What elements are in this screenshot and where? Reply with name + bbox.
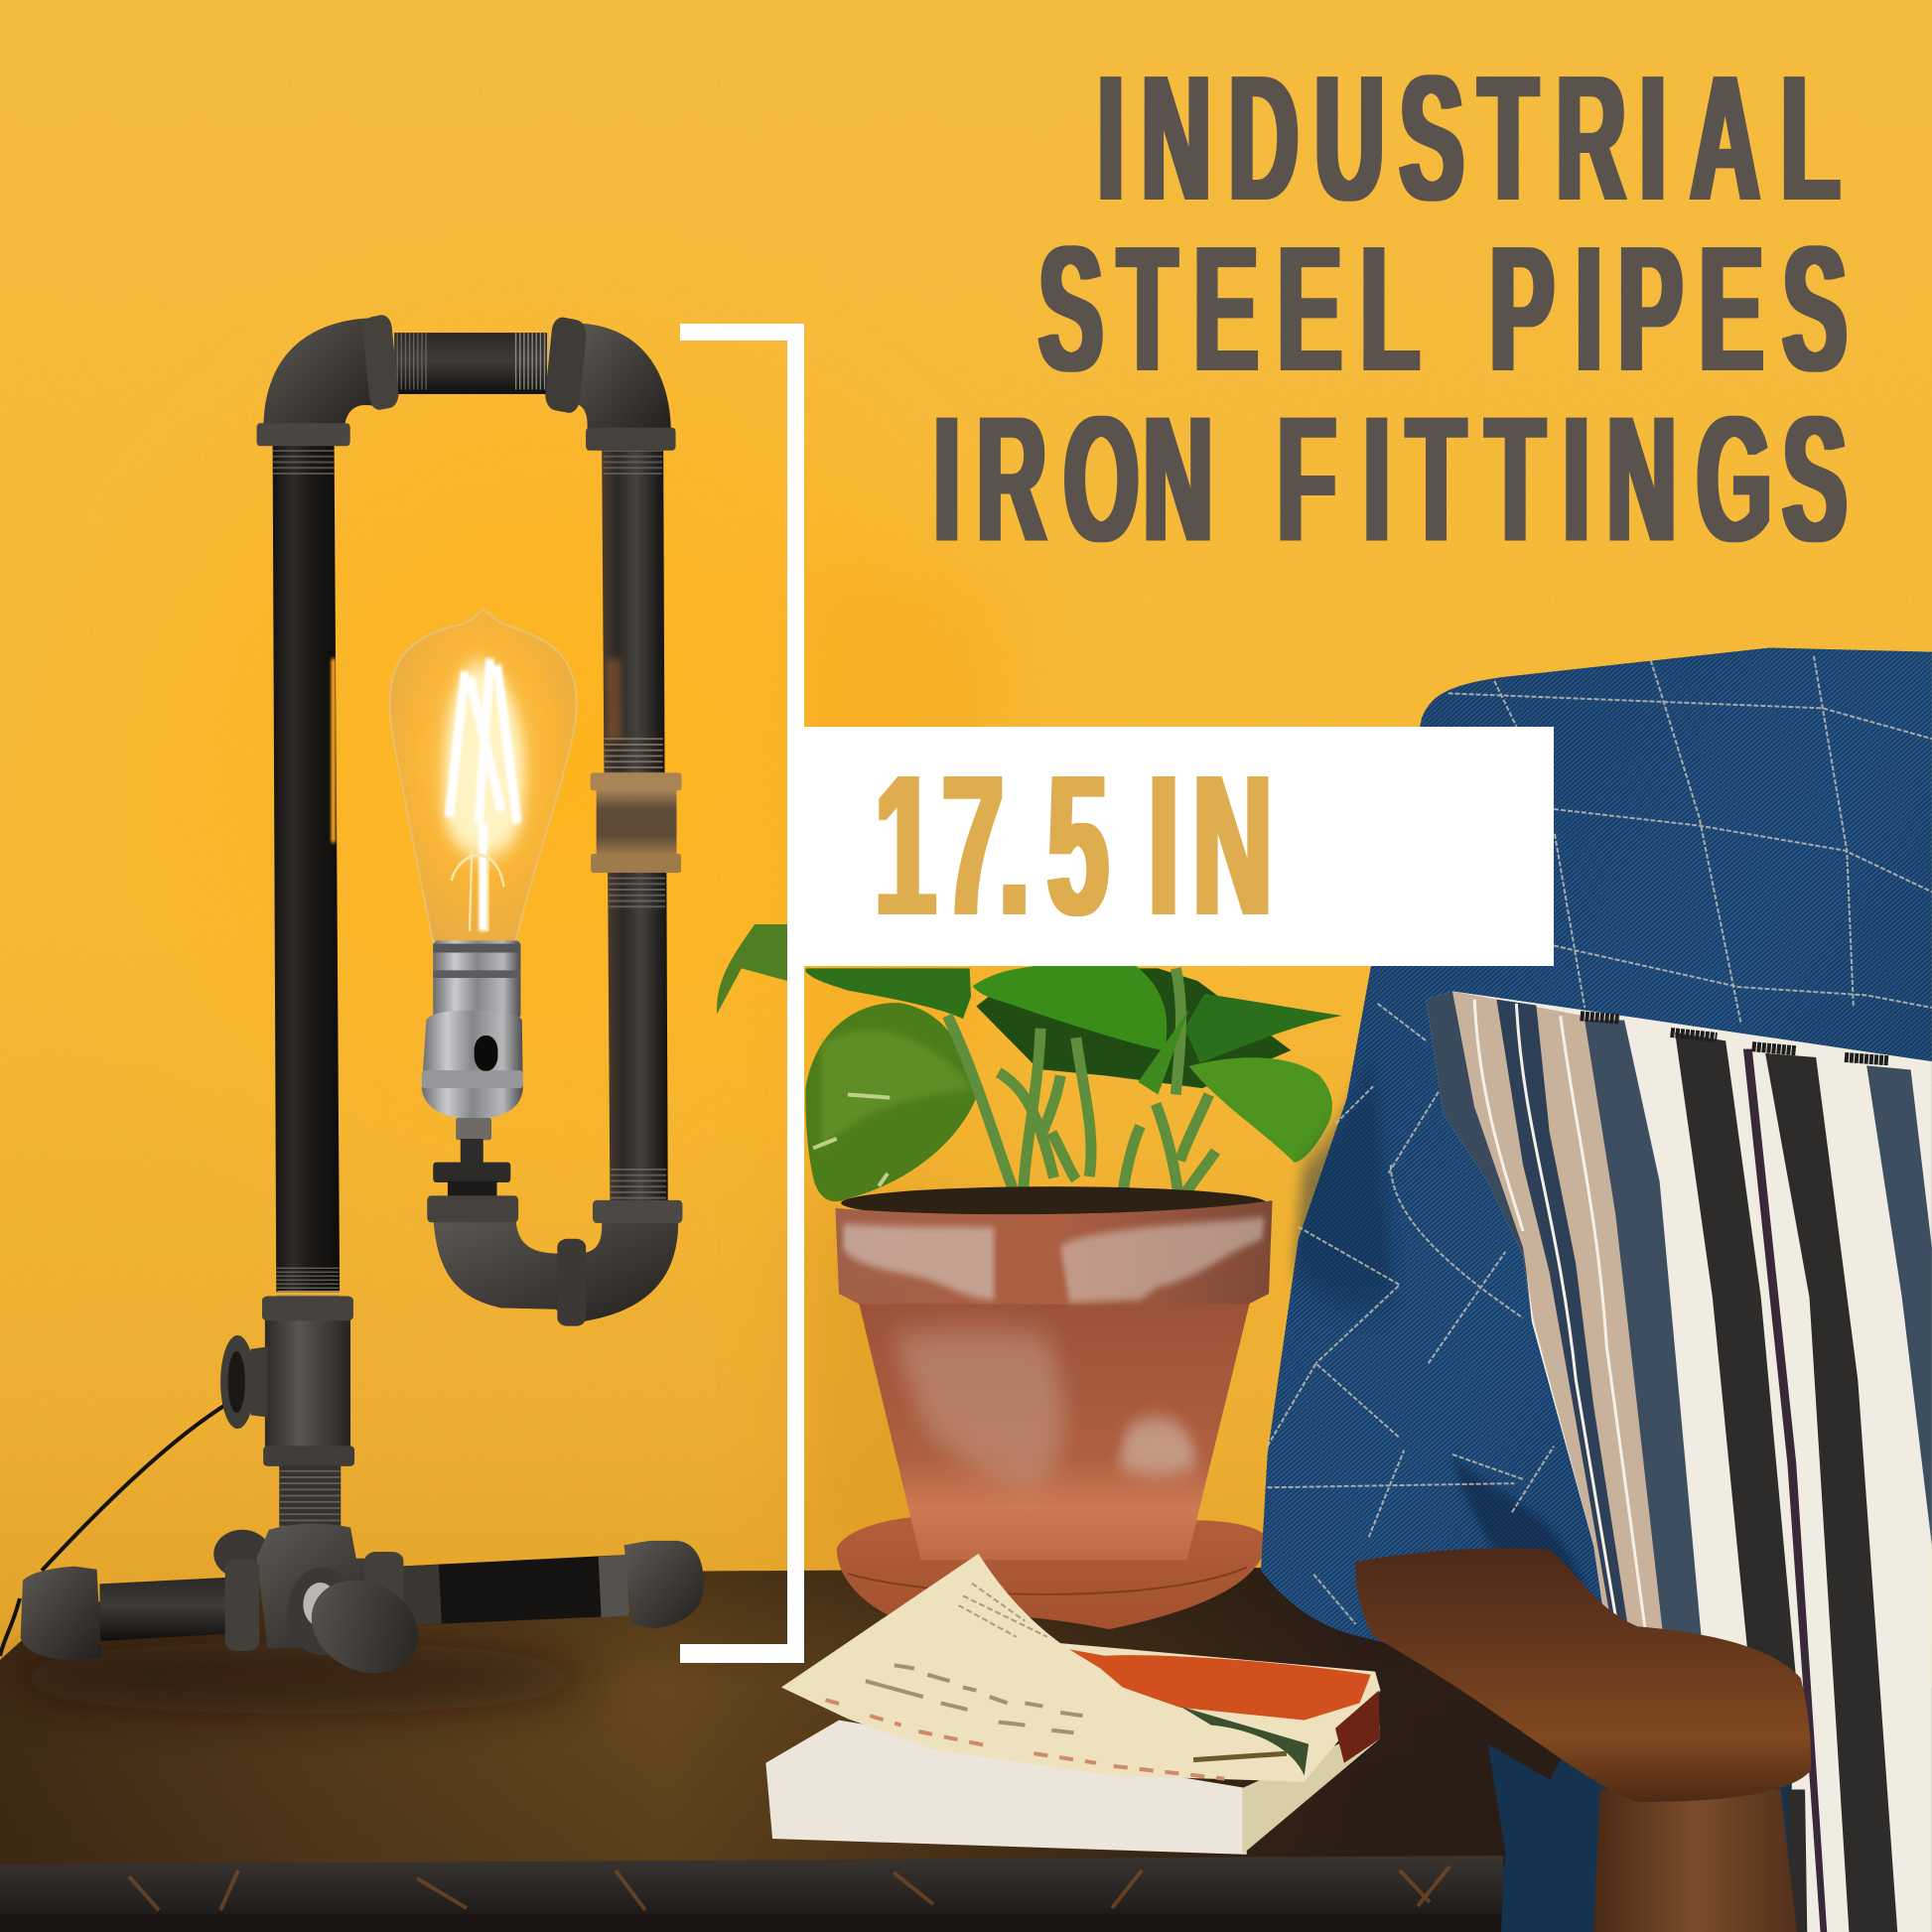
glass bulb <box>390 610 577 942</box>
dimension bracket <box>680 324 804 1663</box>
dimension label panel <box>789 727 1554 966</box>
top left leaf <box>806 968 971 1019</box>
base left pipe and cap <box>21 1567 239 1660</box>
book spine <box>1335 1691 1380 1763</box>
cover illustration: chili <box>1069 1649 1371 1721</box>
table front edge <box>0 1856 1503 1920</box>
U-shaped bottom elbow <box>433 1214 678 1326</box>
book flipped cover <box>781 1554 1380 1782</box>
pot body <box>859 1303 1250 1560</box>
blanket plaid lines <box>1268 656 1932 1624</box>
table top surface <box>0 1567 1588 1866</box>
blanket fold shadows <box>1294 1049 1395 1311</box>
headline line 3: IRON FITTINGS <box>933 378 1847 579</box>
left pipe threads <box>253 1268 362 1298</box>
back dark leaves <box>976 968 1291 1088</box>
wooden armchair arm <box>1355 1548 1811 1932</box>
right upper pipe <box>602 449 665 772</box>
right large leaf <box>1189 1057 1332 1163</box>
brass coupling <box>591 772 682 873</box>
left large leaf <box>805 1003 979 1201</box>
base cross fitting <box>213 1524 439 1688</box>
right pointed leaf <box>1184 994 1342 1063</box>
top left elbow <box>257 313 400 446</box>
headline line 2: STEEL PIPES <box>1038 208 1847 409</box>
right lower pipe <box>608 871 668 1202</box>
socket connector and nut <box>433 1118 510 1197</box>
open book <box>765 1554 1380 1855</box>
striped pillow <box>1426 991 1932 1932</box>
left vertical pipe <box>273 444 340 1292</box>
chair leg <box>1593 1789 1797 1932</box>
front end cap <box>291 1566 439 1688</box>
top center leaf <box>973 966 1167 1050</box>
base right pipe <box>399 1541 704 1629</box>
pot rim <box>835 1200 1273 1304</box>
chrome socket <box>422 940 523 1119</box>
lower elbow flanges <box>427 1195 682 1223</box>
blue plaid blanket <box>1261 647 1932 1932</box>
power cord <box>0 1402 230 1656</box>
plant stems <box>947 968 1215 1208</box>
pillow stripes <box>1426 991 1532 1322</box>
dimension value: 17.5 IN <box>875 734 1272 957</box>
wooden side table <box>0 1567 1588 1932</box>
base riser pipe <box>279 1465 341 1530</box>
saucer <box>837 1516 1267 1629</box>
small leaf behind bracket <box>717 924 788 1014</box>
lamp shadow on table <box>0 1642 596 1714</box>
headline line 1: INDUSTRIAL <box>1097 38 1840 238</box>
tee fitting <box>220 1296 354 1466</box>
soil <box>841 1186 1267 1219</box>
table lamp <box>0 313 704 1688</box>
chair armrest <box>1355 1548 1811 1802</box>
cover lettering marks <box>866 1665 1083 1732</box>
book page block <box>765 1721 1247 1855</box>
top horizontal pipe <box>394 333 559 394</box>
top right elbow <box>544 316 676 451</box>
headline <box>933 38 1847 579</box>
potted plant <box>717 924 1342 1629</box>
